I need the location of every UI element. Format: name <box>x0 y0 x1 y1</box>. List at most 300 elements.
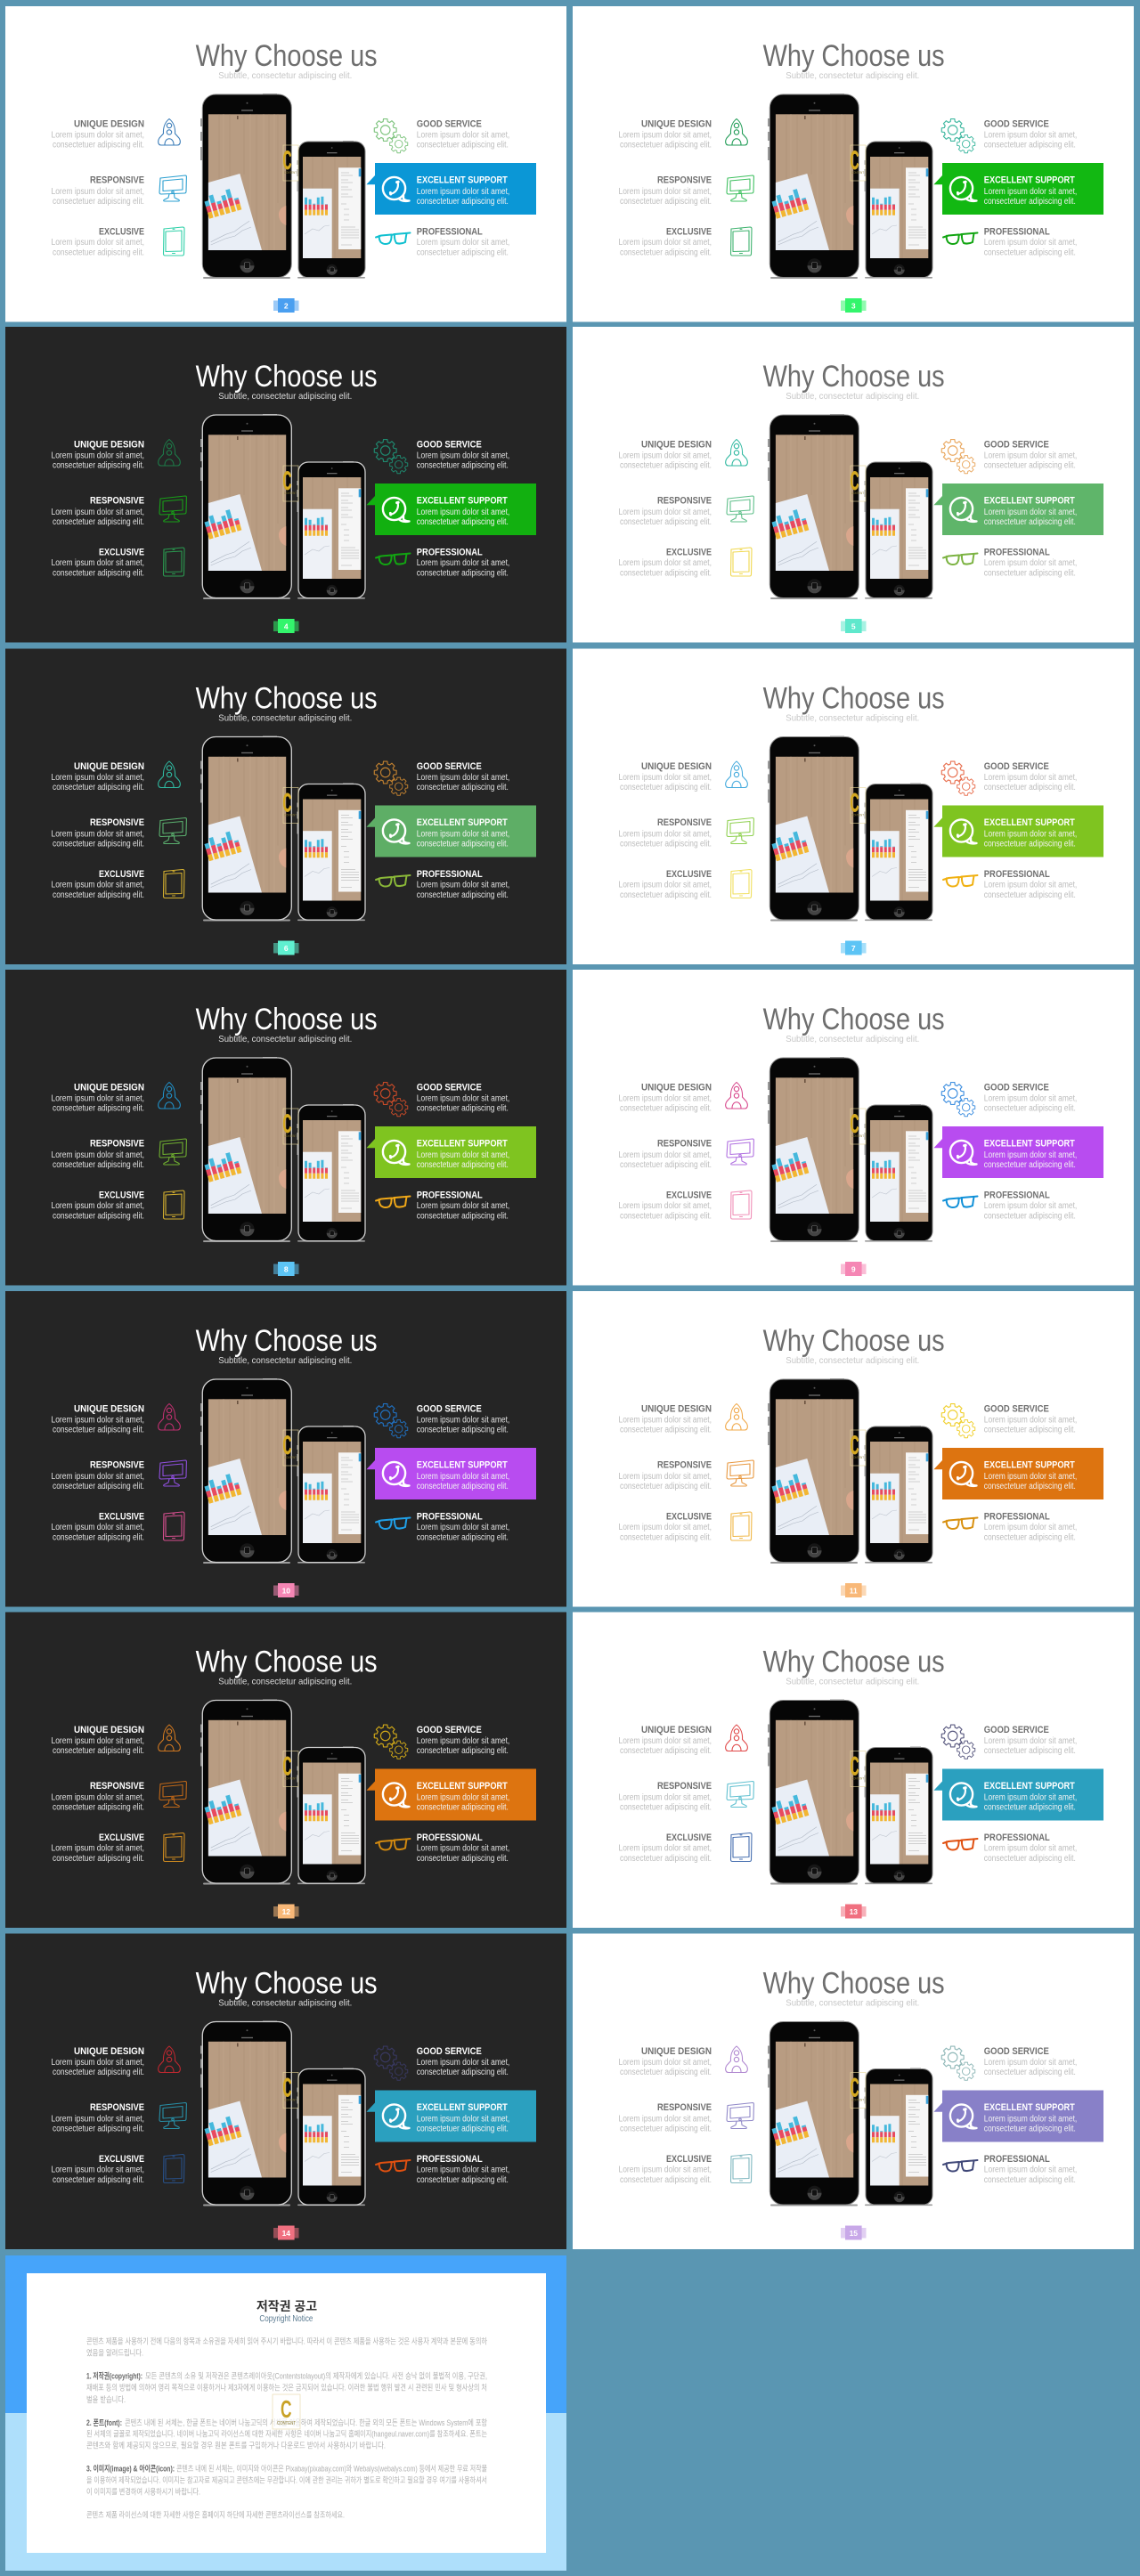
subtitle: Subtitle, consectetur adipiscing elit. <box>218 391 352 402</box>
icon: glasses <box>376 1197 410 1207</box>
feature: unique design <box>618 1082 712 1114</box>
feature: good service: GOOD SERVICE <box>417 2046 482 2057</box>
callout: excellent support <box>933 805 1103 857</box>
callout: excellent support: EXCELLENT SUPPORT <box>984 1139 1075 1150</box>
watermark <box>850 1109 866 1144</box>
phone mockups <box>200 1378 365 1564</box>
page number badge: 4 <box>284 622 289 630</box>
watermark: C <box>850 146 859 175</box>
feature: responsive: RESPONSIVE <box>90 817 144 828</box>
icon: gears <box>941 2046 975 2080</box>
feature: good service: GOOD SERVICE <box>417 439 482 450</box>
watermark: CONTENT <box>284 1455 297 1459</box>
feature: responsive <box>618 817 712 849</box>
feature: good service: consectetuer adipiscing elit. <box>984 2068 1076 2077</box>
panel: slide 5 <box>573 327 1134 643</box>
feature: good service: Lorem ipsum dolor sit amet, <box>984 451 1077 460</box>
feature: exclusive: Lorem ipsum dolor sit amet, <box>52 1523 144 1532</box>
icon: glasses <box>943 1197 978 1207</box>
callout: excellent support: EXCELLENT SUPPORT <box>984 1460 1075 1471</box>
feature: good service: GOOD SERVICE <box>984 1403 1049 1414</box>
feature: unique design: consectetuer adipiscing elit. <box>620 1746 712 1756</box>
feature: professional: Lorem ipsum dolor sit amet, <box>417 238 509 248</box>
icon: tablet <box>730 2155 752 2183</box>
feature: good service: consectetuer adipiscing elit. <box>984 783 1076 792</box>
panel: slide 14 <box>5 1934 566 2249</box>
feature: unique design: UNIQUE DESIGN <box>641 118 712 129</box>
phone mockups <box>768 93 932 279</box>
watermark: CONTENT <box>284 1776 297 1781</box>
feature: good service <box>417 118 509 150</box>
feature: responsive <box>618 175 712 207</box>
feature: responsive: RESPONSIVE <box>90 2102 144 2113</box>
feature: responsive: Lorem ipsum dolor sit amet, <box>618 187 712 197</box>
feature: professional: consectetuer adipiscing elit. <box>984 248 1076 257</box>
feature: exclusive: Lorem ipsum dolor sit amet, <box>618 880 712 890</box>
icon: monitor <box>159 175 186 201</box>
callout: excellent support: consectetuer adipiscing elit. <box>984 1482 1076 1491</box>
feature: exclusive: Lorem ipsum dolor sit amet, <box>52 238 144 248</box>
subtitle: Subtitle, consectetur adipiscing elit. <box>218 1034 352 1044</box>
feature: professional: consectetuer adipiscing elit. <box>417 248 509 257</box>
feature: unique design: Lorem ipsum dolor sit amet, <box>52 1093 144 1103</box>
callout: excellent support: Lorem ipsum dolor sit amet, <box>417 187 509 197</box>
panel: slide 3 <box>573 6 1134 322</box>
feature: professional: PROFESSIONAL <box>984 1511 1050 1522</box>
feature: unique design: UNIQUE DESIGN <box>641 761 712 772</box>
feature: good service <box>417 761 509 792</box>
title: Why Choose us <box>196 1003 378 1036</box>
icon: monitor <box>727 817 753 844</box>
callout: excellent support: consectetuer adipiscing elit. <box>984 839 1076 849</box>
icon: rocket <box>159 1725 180 1751</box>
feature: exclusive <box>618 869 712 900</box>
feature: responsive: consectetuer adipiscing elit. <box>53 1802 144 1813</box>
feature: responsive: consectetuer adipiscing elit. <box>53 2125 144 2133</box>
feature: professional: PROFESSIONAL <box>417 226 483 237</box>
feature: good service: Lorem ipsum dolor sit amet, <box>984 2058 1077 2068</box>
feature: responsive: RESPONSIVE <box>90 496 144 507</box>
feature: good service: Lorem ipsum dolor sit amet, <box>417 2058 509 2068</box>
feature: good service <box>984 1082 1077 1114</box>
title: Why Choose us <box>196 360 378 394</box>
title: Why Choose us <box>763 360 945 394</box>
feature: professional <box>417 547 509 578</box>
feature: exclusive <box>618 1511 712 1542</box>
feature: good service <box>417 439 509 471</box>
callout: excellent support: EXCELLENT SUPPORT <box>417 496 508 507</box>
feature: professional: Lorem ipsum dolor sit amet, <box>417 1523 509 1532</box>
feature: exclusive: consectetuer adipiscing elit. <box>620 2175 712 2185</box>
callout: excellent support: consectetuer adipiscing elit. <box>417 839 509 849</box>
icon: tablet <box>730 1832 752 1861</box>
callout: excellent support <box>933 2091 1103 2142</box>
icon: tablet <box>164 1190 184 1219</box>
feature: good service: GOOD SERVICE <box>417 118 482 129</box>
feature: exclusive: consectetuer adipiscing elit. <box>53 1854 144 1864</box>
notice item: font: 된 서체의 글꼴로 제작되었습니다. 네이버 나눔고딕 라이선스에 대한 자세한 사항은 네이버 나눔고딕 홈페이지(hangeul.naver.com)를 참조하세요. 폰트는 <box>86 2429 487 2439</box>
panel: slide 4 <box>5 327 566 643</box>
feature: responsive: consectetuer adipiscing elit. <box>53 839 144 849</box>
feature: responsive: RESPONSIVE <box>657 1781 712 1792</box>
phone mockups <box>200 414 365 599</box>
page number badge: 3 <box>851 301 856 310</box>
watermark: CONTENT <box>277 2421 296 2426</box>
callout: excellent support: consectetuer adipiscing elit. <box>984 517 1076 527</box>
watermark: C <box>850 467 859 496</box>
panel: slide 8 <box>5 970 566 1286</box>
feature: good service: Lorem ipsum dolor sit amet, <box>984 773 1077 783</box>
callout: excellent support: consectetuer adipiscing elit. <box>984 1802 1076 1813</box>
feature: exclusive: EXCLUSIVE <box>666 869 712 880</box>
feature: unique design: Lorem ipsum dolor sit amet, <box>52 2058 144 2068</box>
callout: excellent support: EXCELLENT SUPPORT <box>417 175 508 186</box>
feature: responsive: Lorem ipsum dolor sit amet, <box>52 2114 144 2125</box>
watermark: C <box>283 1431 292 1460</box>
feature: unique design <box>618 1403 712 1435</box>
feature: unique design <box>52 1725 144 1756</box>
feature: responsive <box>52 496 144 527</box>
feature: responsive <box>52 175 144 207</box>
feature: responsive <box>52 1139 144 1170</box>
feature: good service: Lorem ipsum dolor sit amet, <box>984 1736 1077 1746</box>
watermark: CONTENT <box>851 2098 864 2101</box>
title: Why Choose us <box>763 1324 945 1358</box>
feature: professional: consectetuer adipiscing elit. <box>417 890 509 900</box>
feature: professional: Lorem ipsum dolor sit amet, <box>984 238 1077 248</box>
watermark <box>283 787 298 823</box>
callout: excellent support: Lorem ipsum dolor sit amet, <box>984 1150 1077 1160</box>
page number badge: 10 <box>282 1586 290 1595</box>
watermark <box>850 145 866 181</box>
feature: good service: Lorem ipsum dolor sit amet, <box>417 773 509 783</box>
feature: good service <box>417 1403 509 1435</box>
icon: glasses <box>943 554 978 565</box>
feature: good service: Lorem ipsum dolor sit amet, <box>984 1093 1077 1103</box>
page number badge <box>841 1583 866 1597</box>
icon: tablet <box>730 869 752 898</box>
feature: professional: consectetuer adipiscing elit. <box>417 1211 509 1221</box>
watermark <box>283 1109 298 1144</box>
feature: exclusive: consectetuer adipiscing elit. <box>620 1854 712 1864</box>
feature: professional: PROFESSIONAL <box>984 1190 1050 1200</box>
page number badge <box>841 2226 866 2240</box>
subtitle: Subtitle, consectetur adipiscing elit. <box>786 1355 919 1366</box>
callout: excellent support <box>933 1768 1103 1820</box>
icon: monitor <box>727 496 753 522</box>
feature: professional <box>417 1190 509 1221</box>
callout: excellent support: EXCELLENT SUPPORT <box>984 496 1075 507</box>
feature: unique design: Lorem ipsum dolor sit amet, <box>618 1415 712 1425</box>
feature: responsive: consectetuer adipiscing elit. <box>620 197 712 207</box>
watermark: C <box>283 1752 292 1781</box>
phone mockups <box>768 735 932 921</box>
subtitle: Subtitle, consectetur adipiscing elit. <box>786 712 919 723</box>
feature: responsive: consectetuer adipiscing elit. <box>53 517 144 527</box>
feature: unique design: UNIQUE DESIGN <box>74 761 144 772</box>
feature: unique design: UNIQUE DESIGN <box>74 1725 144 1735</box>
icon: monitor <box>159 817 186 844</box>
feature: exclusive: Lorem ipsum dolor sit amet, <box>618 238 712 248</box>
feature: good service <box>984 439 1077 471</box>
feature: exclusive <box>52 869 144 900</box>
icon: gears <box>374 2046 408 2080</box>
feature: professional: PROFESSIONAL <box>417 1511 483 1522</box>
feature: unique design: UNIQUE DESIGN <box>641 1403 712 1414</box>
icon: rocket <box>159 1403 180 1430</box>
callout: excellent support: Lorem ipsum dolor sit amet, <box>984 508 1077 517</box>
icon: gears <box>374 761 408 795</box>
feature: professional <box>417 2154 509 2185</box>
title: Why Choose us <box>763 1966 945 2000</box>
feature: unique design: consectetuer adipiscing elit. <box>53 461 144 471</box>
page number badge <box>273 1904 299 1918</box>
callout: excellent support <box>366 1126 536 1178</box>
panel: slide 15 <box>573 1934 1134 2249</box>
subtitle: Subtitle, consectetur adipiscing elit. <box>786 391 919 402</box>
feature: exclusive: consectetuer adipiscing elit. <box>620 248 712 257</box>
page number badge <box>841 940 866 955</box>
notice item: font: 콘텐츠 내에 된 서체는, 한글 폰트는 네이버 나눔고딕의 서체를 이용하여 제작되었습니다. 한글 외의 모든 폰트는 Windows System에 포함 <box>125 2418 487 2427</box>
feature: good service <box>984 118 1077 150</box>
icon: tablet <box>164 2155 184 2183</box>
feature: exclusive: EXCLUSIVE <box>666 2154 712 2165</box>
icon: monitor <box>159 1139 186 1165</box>
feature: unique design: UNIQUE DESIGN <box>641 1725 712 1735</box>
icon: gears <box>941 1083 975 1117</box>
feature: unique design: UNIQUE DESIGN <box>74 1082 144 1093</box>
feature: exclusive: consectetuer adipiscing elit. <box>620 1211 712 1221</box>
feature: professional <box>417 1511 509 1542</box>
feature: unique design: UNIQUE DESIGN <box>641 1082 712 1093</box>
icon: rocket <box>159 761 180 787</box>
callout: excellent support: consectetuer adipiscing elit. <box>417 1482 509 1491</box>
feature: unique design: Lorem ipsum dolor sit amet, <box>618 2058 712 2068</box>
feature: good service: consectetuer adipiscing elit. <box>417 141 509 150</box>
feature: good service: Lorem ipsum dolor sit amet, <box>417 1736 509 1746</box>
feature: professional <box>984 1832 1077 1864</box>
feature: responsive <box>618 1460 712 1491</box>
feature: unique design: consectetuer adipiscing elit. <box>620 783 712 792</box>
notice intro: 콘텐츠 제품을 사용하기 전에 다음의 항목과 소유권을 자세히 읽어 주시기 바랍니다. 따라서 이 콘텐츠 제품을 사용하는 것은 사용자 계약과 본문에 동의하 <box>86 2336 488 2345</box>
feature: good service: consectetuer adipiscing elit. <box>984 461 1076 471</box>
watermark: C <box>283 467 292 496</box>
feature: good service: Lorem ipsum dolor sit amet, <box>417 130 509 140</box>
phone mockups <box>768 414 932 599</box>
feature: exclusive: Lorem ipsum dolor sit amet, <box>618 1843 712 1854</box>
feature: good service <box>417 2046 509 2077</box>
feature: unique design: consectetuer adipiscing elit. <box>53 783 144 792</box>
feature: responsive <box>52 817 144 849</box>
notice item: image and icon: 콘텐츠 내에 된 서체는, 이미지와 아이콘은 Pixabay(pixabay.com)와 Webalys(webalys.com) 등에서 제공한 무료 저작물 <box>176 2464 487 2474</box>
callout: excellent support <box>933 1126 1103 1178</box>
page number badge: 6 <box>284 944 289 953</box>
feature: professional: consectetuer adipiscing elit. <box>984 1854 1076 1864</box>
feature: good service <box>984 1725 1077 1756</box>
panel: copyright notice <box>5 2255 566 2571</box>
feature: unique design: UNIQUE DESIGN <box>74 439 144 450</box>
feature: responsive: consectetuer adipiscing elit. <box>53 1482 144 1491</box>
feature: professional: consectetuer adipiscing elit. <box>984 2175 1076 2185</box>
feature: professional: PROFESSIONAL <box>417 869 483 880</box>
notice heading: 저작권 공고 <box>256 2299 317 2313</box>
icon: monitor <box>159 1460 186 1486</box>
feature: unique design <box>52 761 144 792</box>
feature: professional: Lorem ipsum dolor sit amet, <box>417 558 509 568</box>
feature: exclusive <box>52 2154 144 2185</box>
watermark: C <box>283 1109 292 1139</box>
page number badge: 5 <box>851 622 856 630</box>
feature: unique design: Lorem ipsum dolor sit amet, <box>618 1736 712 1746</box>
icon: tablet <box>164 548 184 576</box>
notice item: font: 2. 폰트(font): <box>86 2418 122 2427</box>
subtitle: Subtitle, consectetur adipiscing elit. <box>218 712 352 723</box>
icon: gears <box>941 440 975 474</box>
feature: good service: Lorem ipsum dolor sit amet, <box>984 1415 1077 1425</box>
feature: exclusive: Lorem ipsum dolor sit amet, <box>618 2166 712 2174</box>
feature: professional: consectetuer adipiscing elit. <box>984 1211 1076 1221</box>
notice item: copyright: 재배포 등의 방법에 의하여 영리 목적으로 이용하거나 제3자에게 이용하는 것은 금지되어 있습니다. 이러한 불법 행위 발견 시 관련된 민사 및 형사상의 처 <box>86 2383 487 2393</box>
subtitle: Subtitle, consectetur adipiscing elit. <box>218 70 352 81</box>
feature: unique design <box>52 2046 144 2077</box>
icon: gears <box>941 1725 975 1759</box>
feature: good service: consectetuer adipiscing elit. <box>417 1104 509 1114</box>
feature: responsive: consectetuer adipiscing elit. <box>620 1482 712 1491</box>
feature: good service: Lorem ipsum dolor sit amet, <box>417 1093 509 1103</box>
feature: exclusive <box>52 1511 144 1542</box>
title: Why Choose us <box>196 39 378 73</box>
feature: responsive: Lorem ipsum dolor sit amet, <box>52 830 144 839</box>
page number badge: 11 <box>850 1586 858 1595</box>
feature: exclusive: EXCLUSIVE <box>99 1832 144 1843</box>
feature: responsive: consectetuer adipiscing elit. <box>620 839 712 849</box>
title: Why Choose us <box>196 1324 378 1358</box>
icon: gears <box>941 119 975 153</box>
panel: slide 9 <box>573 970 1134 1286</box>
callout: excellent support <box>366 1768 536 1820</box>
feature: responsive: Lorem ipsum dolor sit amet, <box>618 1150 712 1160</box>
watermark <box>850 787 866 823</box>
feature: unique design: UNIQUE DESIGN <box>74 2046 144 2057</box>
icon: rocket <box>726 1725 747 1751</box>
callout: excellent support: EXCELLENT SUPPORT <box>984 2102 1075 2113</box>
watermark <box>283 1751 298 1786</box>
feature: professional: Lorem ipsum dolor sit amet, <box>984 1843 1077 1854</box>
feature: good service: consectetuer adipiscing elit. <box>984 1426 1076 1435</box>
feature: unique design: consectetuer adipiscing elit. <box>620 2068 712 2077</box>
feature: good service: GOOD SERVICE <box>417 1403 482 1414</box>
watermark: CONTENT <box>851 812 864 817</box>
callout: excellent support: EXCELLENT SUPPORT <box>417 817 508 828</box>
title: Why Choose us <box>763 682 945 716</box>
feature: responsive: consectetuer adipiscing elit. <box>620 1802 712 1813</box>
feature: unique design: Lorem ipsum dolor sit amet, <box>52 1736 144 1746</box>
feature: exclusive: consectetuer adipiscing elit. <box>53 248 144 257</box>
feature: exclusive: EXCLUSIVE <box>666 1511 712 1522</box>
icon: rocket <box>726 119 747 145</box>
feature: good service: Lorem ipsum dolor sit amet, <box>984 130 1077 140</box>
feature: professional: Lorem ipsum dolor sit amet, <box>984 1523 1077 1532</box>
feature: professional: consectetuer adipiscing elit. <box>984 568 1076 578</box>
feature: unique design: consectetuer adipiscing elit. <box>53 141 144 150</box>
feature: exclusive: consectetuer adipiscing elit. <box>53 1211 144 1221</box>
callout: excellent support: Lorem ipsum dolor sit amet, <box>984 2114 1077 2125</box>
callout: excellent support <box>366 163 536 215</box>
feature: professional: Lorem ipsum dolor sit amet, <box>417 1201 509 1211</box>
panel: slide 11 <box>573 1291 1134 1606</box>
feature: professional: PROFESSIONAL <box>417 547 483 557</box>
feature: unique design: consectetuer adipiscing elit. <box>620 461 712 471</box>
subtitle: Subtitle, consectetur adipiscing elit. <box>786 1676 919 1686</box>
feature: responsive: RESPONSIVE <box>90 1460 144 1471</box>
feature: professional: Lorem ipsum dolor sit amet, <box>984 880 1077 890</box>
feature: exclusive: EXCLUSIVE <box>99 226 144 237</box>
feature: unique design: consectetuer adipiscing elit. <box>53 1426 144 1435</box>
callout: excellent support: consectetuer adipiscing elit. <box>984 2125 1076 2133</box>
icon: tablet <box>164 227 184 256</box>
callout: excellent support: Lorem ipsum dolor sit amet, <box>417 1793 509 1802</box>
feature: good service: Lorem ipsum dolor sit amet, <box>417 451 509 460</box>
subtitle: Subtitle, consectetur adipiscing elit. <box>218 1355 352 1366</box>
feature: professional: PROFESSIONAL <box>984 1832 1050 1843</box>
feature: unique design: Lorem ipsum dolor sit amet, <box>52 451 144 460</box>
watermark: C <box>283 789 292 817</box>
feature: responsive: Lorem ipsum dolor sit amet, <box>52 1150 144 1160</box>
title: Why Choose us <box>763 39 945 73</box>
feature: good service: consectetuer adipiscing elit. <box>417 2068 509 2077</box>
notice item: image and icon: 을 이용하여 제작되었습니다. 이미지는 참고자료 제공되고 콘텐츠에는 무관합니다. 이에 관한 권리는 귀하가 별도로 확인하고 필요할 경우 여기를 사용하셔서 <box>86 2475 487 2485</box>
feature: professional: PROFESSIONAL <box>417 1832 483 1843</box>
feature: professional: consectetuer adipiscing elit. <box>417 568 509 578</box>
feature: good service <box>984 761 1077 792</box>
phone mockups <box>768 1057 932 1242</box>
icon: rocket <box>159 1083 180 1109</box>
icon: gears <box>374 119 408 153</box>
watermark <box>283 145 298 181</box>
page number badge: 7 <box>851 944 856 953</box>
feature: exclusive: Lorem ipsum dolor sit amet, <box>52 2166 144 2174</box>
watermark <box>850 1430 866 1466</box>
feature: exclusive: consectetuer adipiscing elit. <box>53 2175 144 2185</box>
feature: exclusive: EXCLUSIVE <box>99 1190 144 1200</box>
watermark <box>283 1430 298 1466</box>
feature: exclusive: EXCLUSIVE <box>666 547 712 557</box>
watermark <box>273 2394 300 2429</box>
icon: glasses <box>376 875 410 887</box>
icon: glasses <box>943 1517 978 1529</box>
title: Why Choose us <box>196 682 378 716</box>
feature: unique design: Lorem ipsum dolor sit amet, <box>52 130 144 140</box>
feature: responsive: consectetuer adipiscing elit. <box>620 2125 712 2133</box>
icon: rocket <box>726 1083 747 1109</box>
callout: excellent support <box>933 163 1103 215</box>
phone mockups <box>200 735 365 921</box>
watermark <box>850 1751 866 1786</box>
icon: gears <box>374 1404 408 1438</box>
watermark: C <box>283 2073 292 2103</box>
feature: professional <box>984 1190 1077 1221</box>
feature: unique design <box>52 1403 144 1435</box>
feature: professional <box>417 1832 509 1864</box>
feature: good service: consectetuer adipiscing elit. <box>417 1746 509 1756</box>
feature: good service: consectetuer adipiscing elit. <box>417 1426 509 1435</box>
feature: professional <box>417 226 509 257</box>
icon: rocket <box>726 440 747 466</box>
feature: professional: consectetuer adipiscing elit. <box>417 1854 509 1864</box>
feature: exclusive <box>618 226 712 257</box>
callout: excellent support <box>366 805 536 857</box>
feature: unique design <box>618 1725 712 1756</box>
